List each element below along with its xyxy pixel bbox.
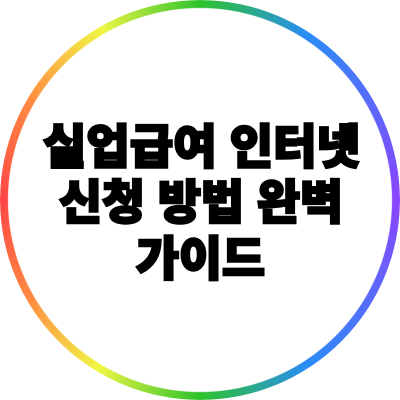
title: 가이드 xyxy=(136,232,265,286)
title: 실업급여 인터넷 xyxy=(43,120,360,174)
title: 신청 방법 완벽 xyxy=(59,176,343,229)
